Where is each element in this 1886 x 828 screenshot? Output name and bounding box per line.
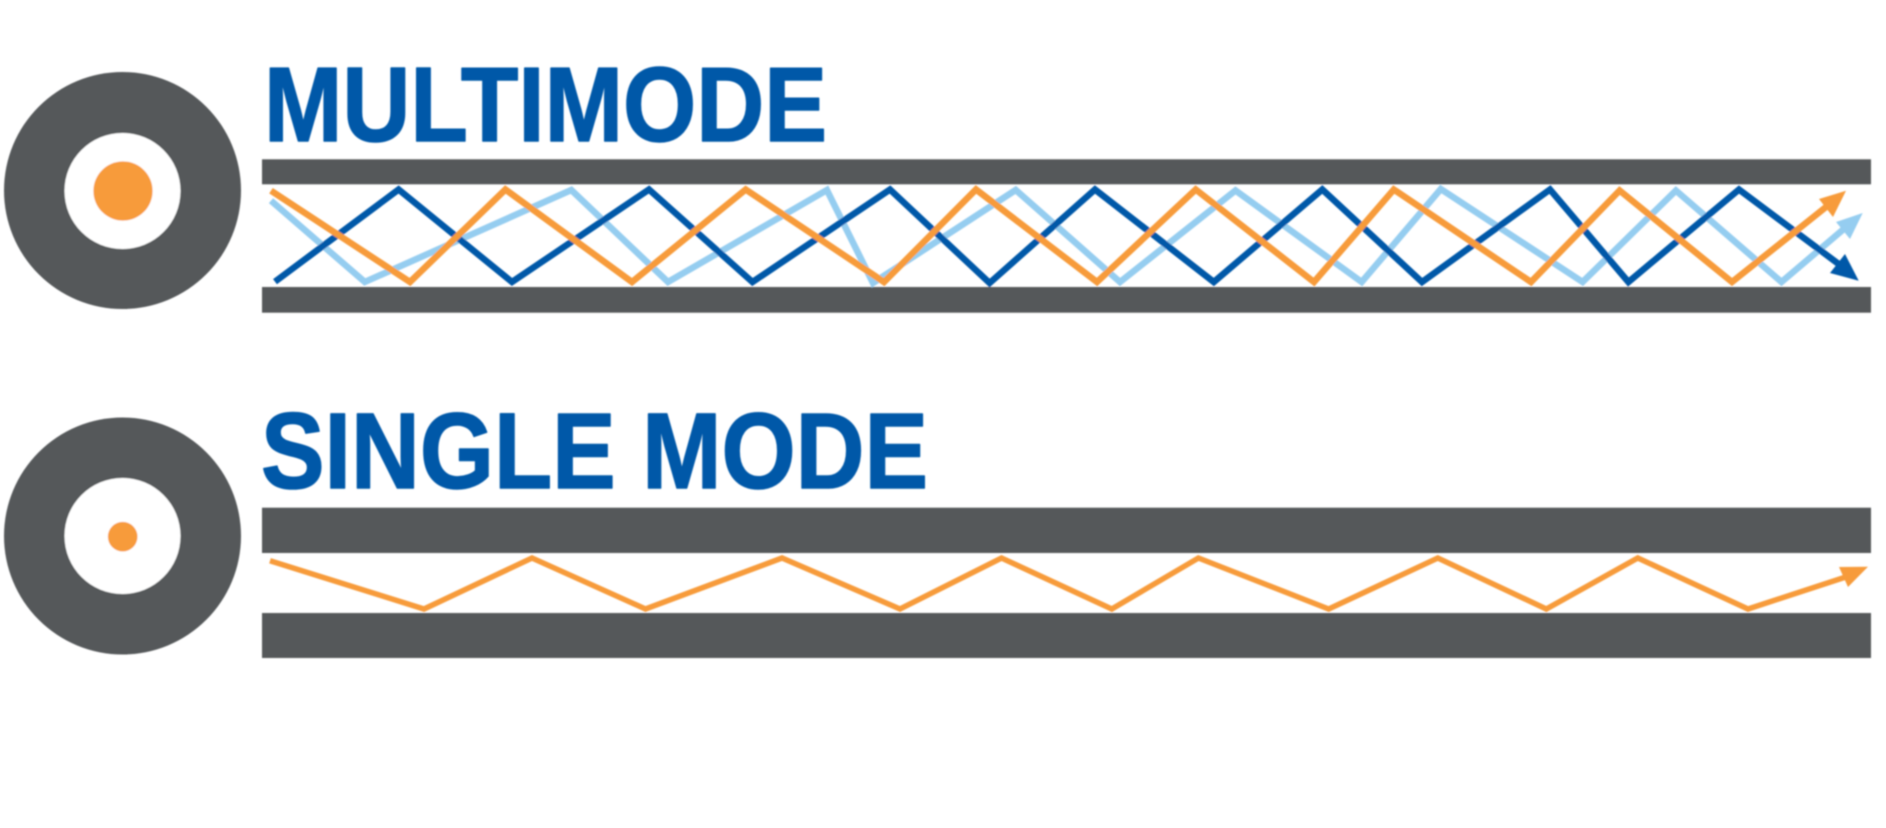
dark blue light path with arrow [275,190,1859,283]
heading: multimode: MULTIMODE [264,46,827,164]
light blue light path with arrow [271,189,1863,283]
icon: single mode fiber cross-section [4,418,241,654]
icon: multimode fiber cross-section [4,72,241,309]
top cladding bar [262,159,1871,184]
bottom cladding bar [262,287,1871,313]
heading: single mode: SINGLE MODE [261,390,928,511]
bottom cladding bar [262,613,1871,658]
orange light path with arrow [271,190,1846,282]
panel: multimode [4,46,1871,313]
top cladding bar [262,508,1871,553]
panel: single mode [4,390,1871,658]
orange light path with arrow [270,558,1868,609]
